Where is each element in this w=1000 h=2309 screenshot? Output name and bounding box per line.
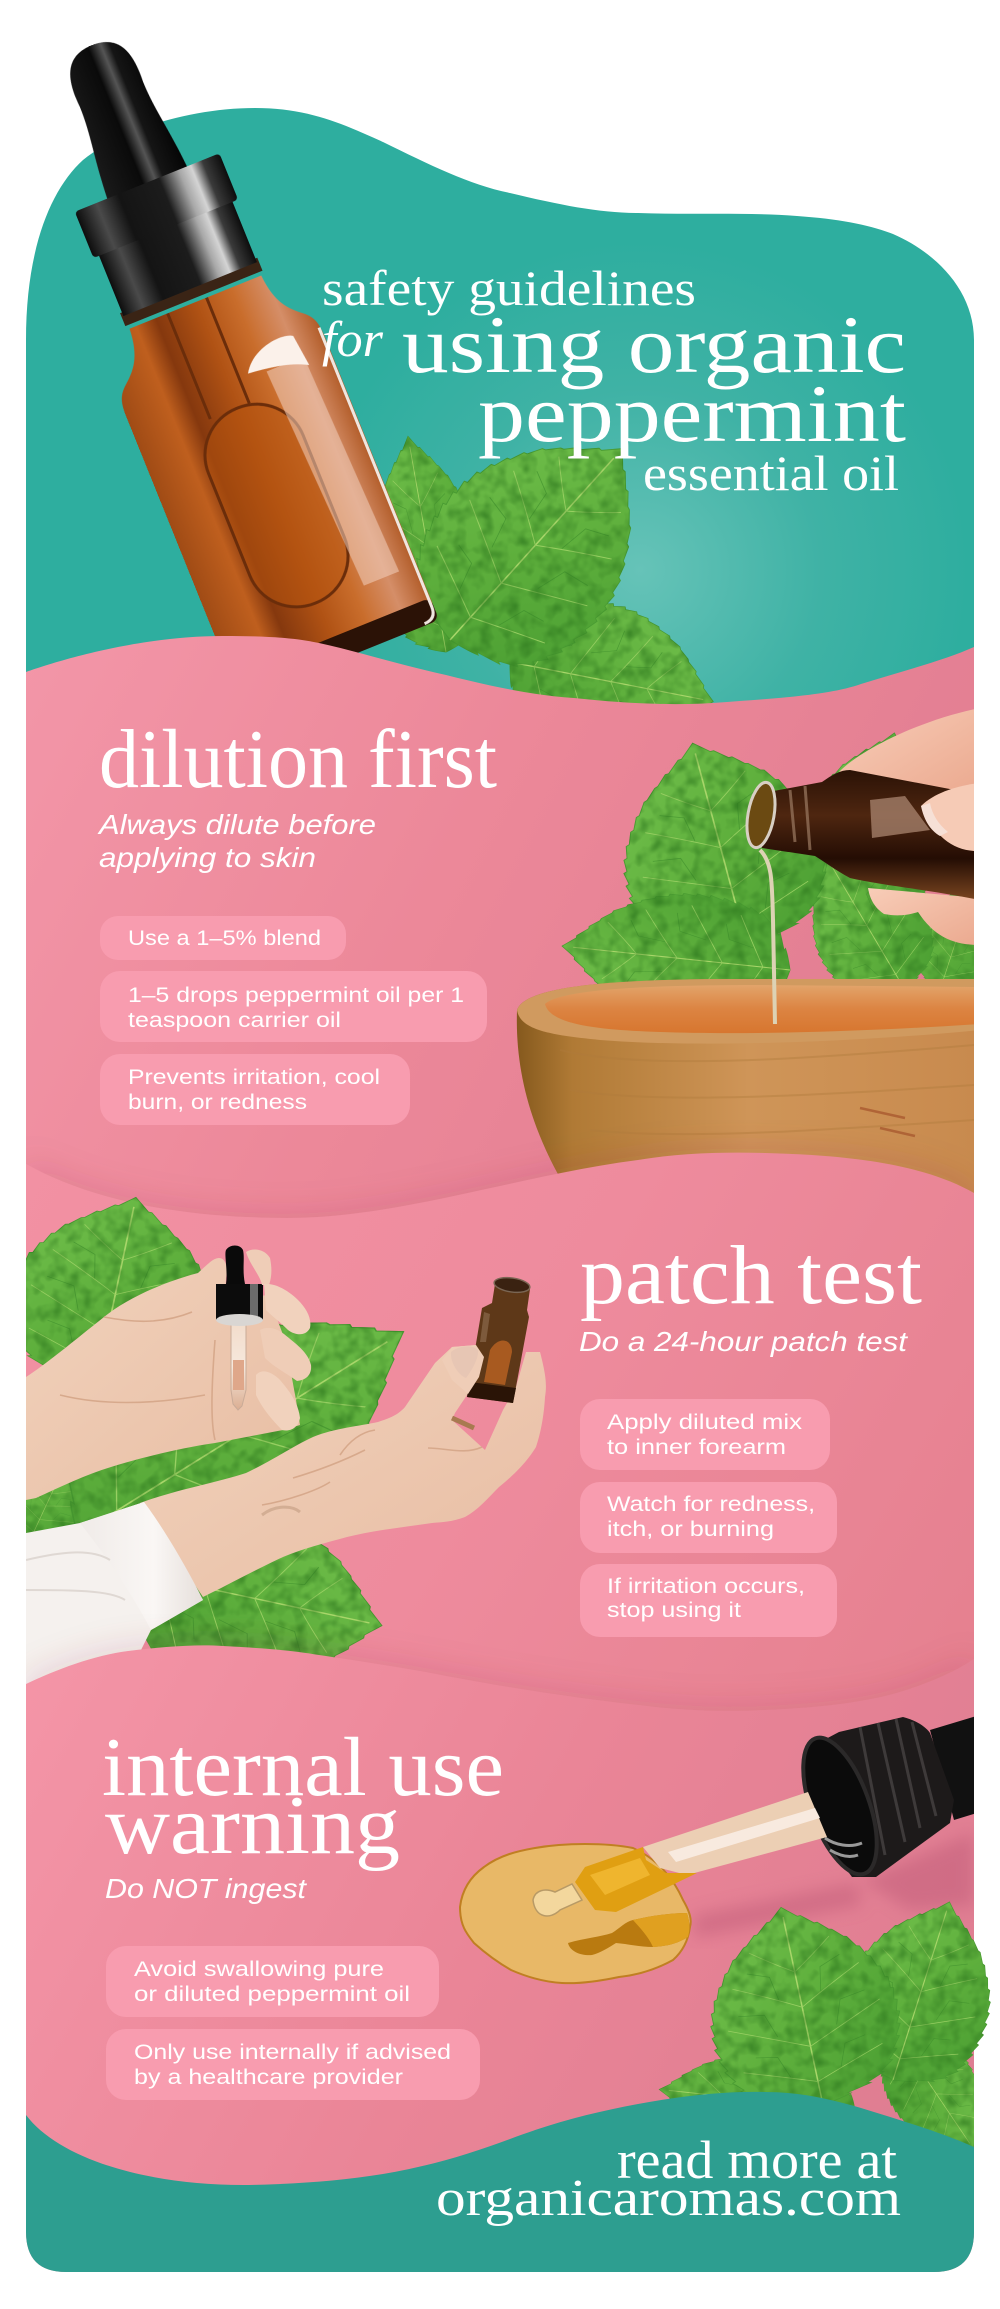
title: using organic bbox=[402, 299, 906, 390]
icon: hand pouring brown bottle with oil stream bbox=[742, 708, 980, 1024]
callout: avoid pill: Avoid swallowing pure bbox=[134, 1958, 384, 1981]
heading: internal use warning bbox=[102, 1721, 504, 1872]
heading: internal use warning: warning bbox=[105, 1779, 400, 1872]
title: essential oil bbox=[643, 445, 899, 501]
title bbox=[322, 260, 906, 501]
panel: internal use warning background bbox=[26, 1645, 974, 2272]
callout: blend pill bbox=[100, 916, 346, 960]
text block: read more footer: read more at bbox=[617, 2130, 897, 2190]
icon: dropper shadow on surface bbox=[693, 1833, 974, 1938]
callout: only use pill: Only use internally if advised bbox=[134, 2041, 451, 2064]
callout: avoid pill: or diluted peppermint oil bbox=[134, 1983, 410, 2006]
text block: dilution subtitle: applying to skin bbox=[99, 842, 316, 873]
callout: drops pill bbox=[100, 971, 487, 1042]
title: safety guidelines bbox=[322, 260, 696, 316]
panel: dilution first background bbox=[26, 636, 974, 1218]
callout: only use pill bbox=[106, 2029, 480, 2100]
callout: watch pill: Watch for redness, bbox=[607, 1493, 815, 1516]
callout: prevents pill: Prevents irritation, cool bbox=[128, 1066, 380, 1089]
callout: drops pill: 1–5 drops peppermint oil per 1 bbox=[128, 984, 464, 1007]
icon: white sleeve bbox=[26, 1502, 203, 1692]
callout: apply pill: to inner forearm bbox=[607, 1436, 786, 1459]
icon: wooden bowl bbox=[516, 979, 974, 1193]
icon: mint leaves bottom right bbox=[658, 1901, 991, 2147]
callout: avoid pill bbox=[106, 1946, 439, 2017]
panel: patch test background bbox=[26, 1144, 974, 1711]
panel: read more footer bbox=[26, 2092, 974, 2272]
panel: header teal background bbox=[26, 108, 974, 704]
text block: patch test subtitle: Do a 24-hour patch test bbox=[579, 1326, 908, 1357]
callout: irritation pill bbox=[580, 1564, 837, 1637]
heading: dilution first: dilution first bbox=[99, 713, 497, 806]
callout: apply pill bbox=[580, 1399, 830, 1470]
callout: watch pill bbox=[580, 1482, 837, 1553]
icon: mint leaves behind bowl bbox=[562, 732, 974, 984]
heading: patch test: patch test bbox=[580, 1229, 922, 1322]
heading: internal use warning: internal use bbox=[102, 1721, 504, 1814]
icon: amber dropper bottle bbox=[0, 5, 439, 700]
text block: dilution subtitle bbox=[97, 809, 376, 873]
icon: oil puddle bbox=[460, 1844, 691, 1983]
title: for bbox=[322, 311, 384, 367]
callout: only use pill: by a healthcare provider bbox=[134, 2066, 403, 2089]
text block: internal use subtitle: Do NOT ingest bbox=[105, 1873, 307, 1904]
icon: right hand holding small bottle bbox=[140, 1345, 546, 1597]
callout: watch pill: itch, or burning bbox=[607, 1518, 774, 1541]
callout: prevents pill: burn, or redness bbox=[128, 1091, 307, 1114]
icon: left hand holding dropper bbox=[26, 1246, 311, 1500]
title: peppermint bbox=[478, 368, 906, 459]
text block: read more footer: organicaromas.com bbox=[436, 2170, 901, 2227]
icon: mint leaves behind hands bbox=[26, 1196, 404, 1658]
callout: drops pill: teaspoon carrier oil bbox=[128, 1009, 341, 1032]
icon: glass dropper with black cap bbox=[533, 1715, 980, 1916]
callout: irritation pill: stop using it bbox=[607, 1599, 741, 1622]
text block: read more footer bbox=[436, 2130, 901, 2227]
icon: mint leaves behind header bottle bbox=[356, 384, 728, 777]
callout: irritation pill: If irritation occurs, bbox=[607, 1575, 805, 1598]
icon: small amber bottle bbox=[442, 1276, 531, 1403]
callout: prevents pill bbox=[100, 1054, 410, 1125]
text block: dilution subtitle: Always dilute before bbox=[97, 809, 376, 840]
callout: apply pill: Apply diluted mix bbox=[607, 1411, 803, 1434]
callout: blend pill: Use a 1–5% blend bbox=[128, 927, 321, 950]
